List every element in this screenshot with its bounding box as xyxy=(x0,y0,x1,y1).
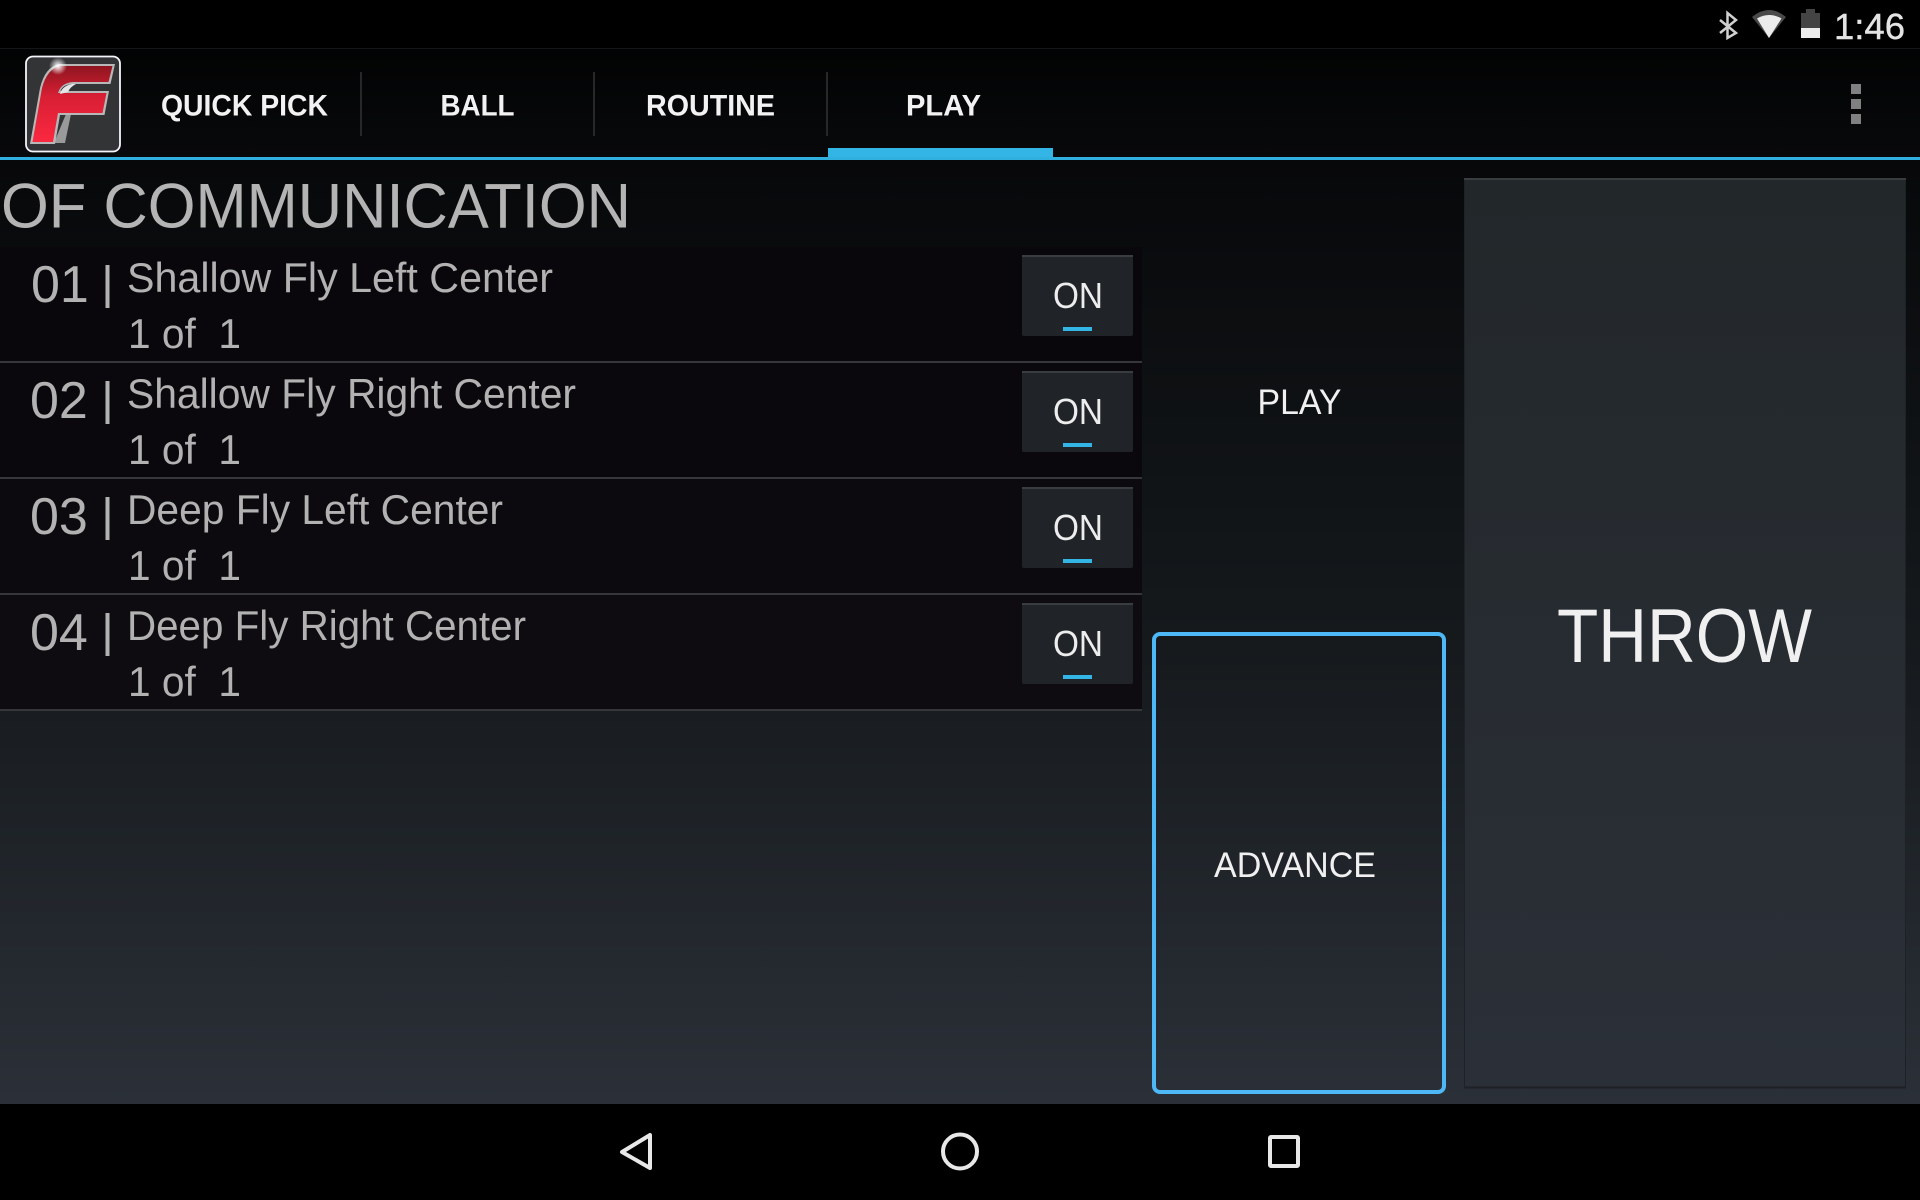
clock: 1:46 xyxy=(1834,6,1905,47)
toggle: on: ON xyxy=(1053,623,1103,664)
play label: PLAY xyxy=(1258,383,1342,422)
list row 02: Shallow Fly Right Center xyxy=(127,370,576,417)
list row 02: 1 of 1 xyxy=(128,426,241,473)
icon: back xyxy=(622,1135,650,1168)
icon: home xyxy=(943,1134,977,1168)
icon: recents xyxy=(1270,1137,1298,1166)
icon: battery xyxy=(1801,9,1820,38)
advance button: ADVANCE xyxy=(1214,846,1376,885)
toggle: on: ON xyxy=(1053,507,1103,548)
throw button: THROW xyxy=(1557,594,1812,679)
tab: play (selected): PLAY xyxy=(906,90,981,122)
icon: wifi xyxy=(1752,10,1786,38)
throw button xyxy=(1464,178,1906,1088)
list row 03 xyxy=(0,479,1142,595)
navigation bar xyxy=(0,1104,1920,1200)
list row 04: Deep Fly Right Center xyxy=(127,602,526,649)
list row 04: 1 of 1 xyxy=(128,658,241,705)
tab: quick pick: QUICK PICK xyxy=(161,90,328,122)
list row 01 xyxy=(0,247,1142,363)
list row 01: 01 xyxy=(31,256,89,314)
action bar xyxy=(0,48,1920,158)
list row 04: 04 xyxy=(30,604,88,662)
list row 03: Deep Fly Left Center xyxy=(127,486,503,533)
toggle: on xyxy=(1022,487,1133,568)
toggle: on: ON xyxy=(1053,391,1103,432)
list row 01: Shallow Fly Left Center xyxy=(127,254,553,301)
tab bar accent line xyxy=(0,157,1920,160)
heading: OF COMMUNICATION xyxy=(1,172,631,242)
content background xyxy=(0,160,1920,1104)
toggle: on xyxy=(1022,603,1133,684)
list row 02: 02 xyxy=(30,372,88,430)
toggle: on xyxy=(1022,255,1133,336)
list row 04 xyxy=(0,595,1142,711)
icon: bluetooth xyxy=(1720,13,1736,38)
list row 01: 1 of 1 xyxy=(128,310,241,357)
tab: ball: BALL xyxy=(440,90,514,122)
list row 03: 03 xyxy=(30,488,88,546)
list row 02 xyxy=(0,363,1142,479)
icon: overflow menu xyxy=(1851,84,1861,124)
list row 03: 1 of 1 xyxy=(128,542,241,589)
icon: app logo xyxy=(26,56,120,152)
tab: routine: ROUTINE xyxy=(646,90,775,122)
status bar xyxy=(0,0,1920,48)
advance button xyxy=(1154,634,1444,1092)
toggle: on xyxy=(1022,371,1133,452)
tab: play (selected) xyxy=(828,90,1053,158)
toggle: on: ON xyxy=(1053,275,1103,316)
